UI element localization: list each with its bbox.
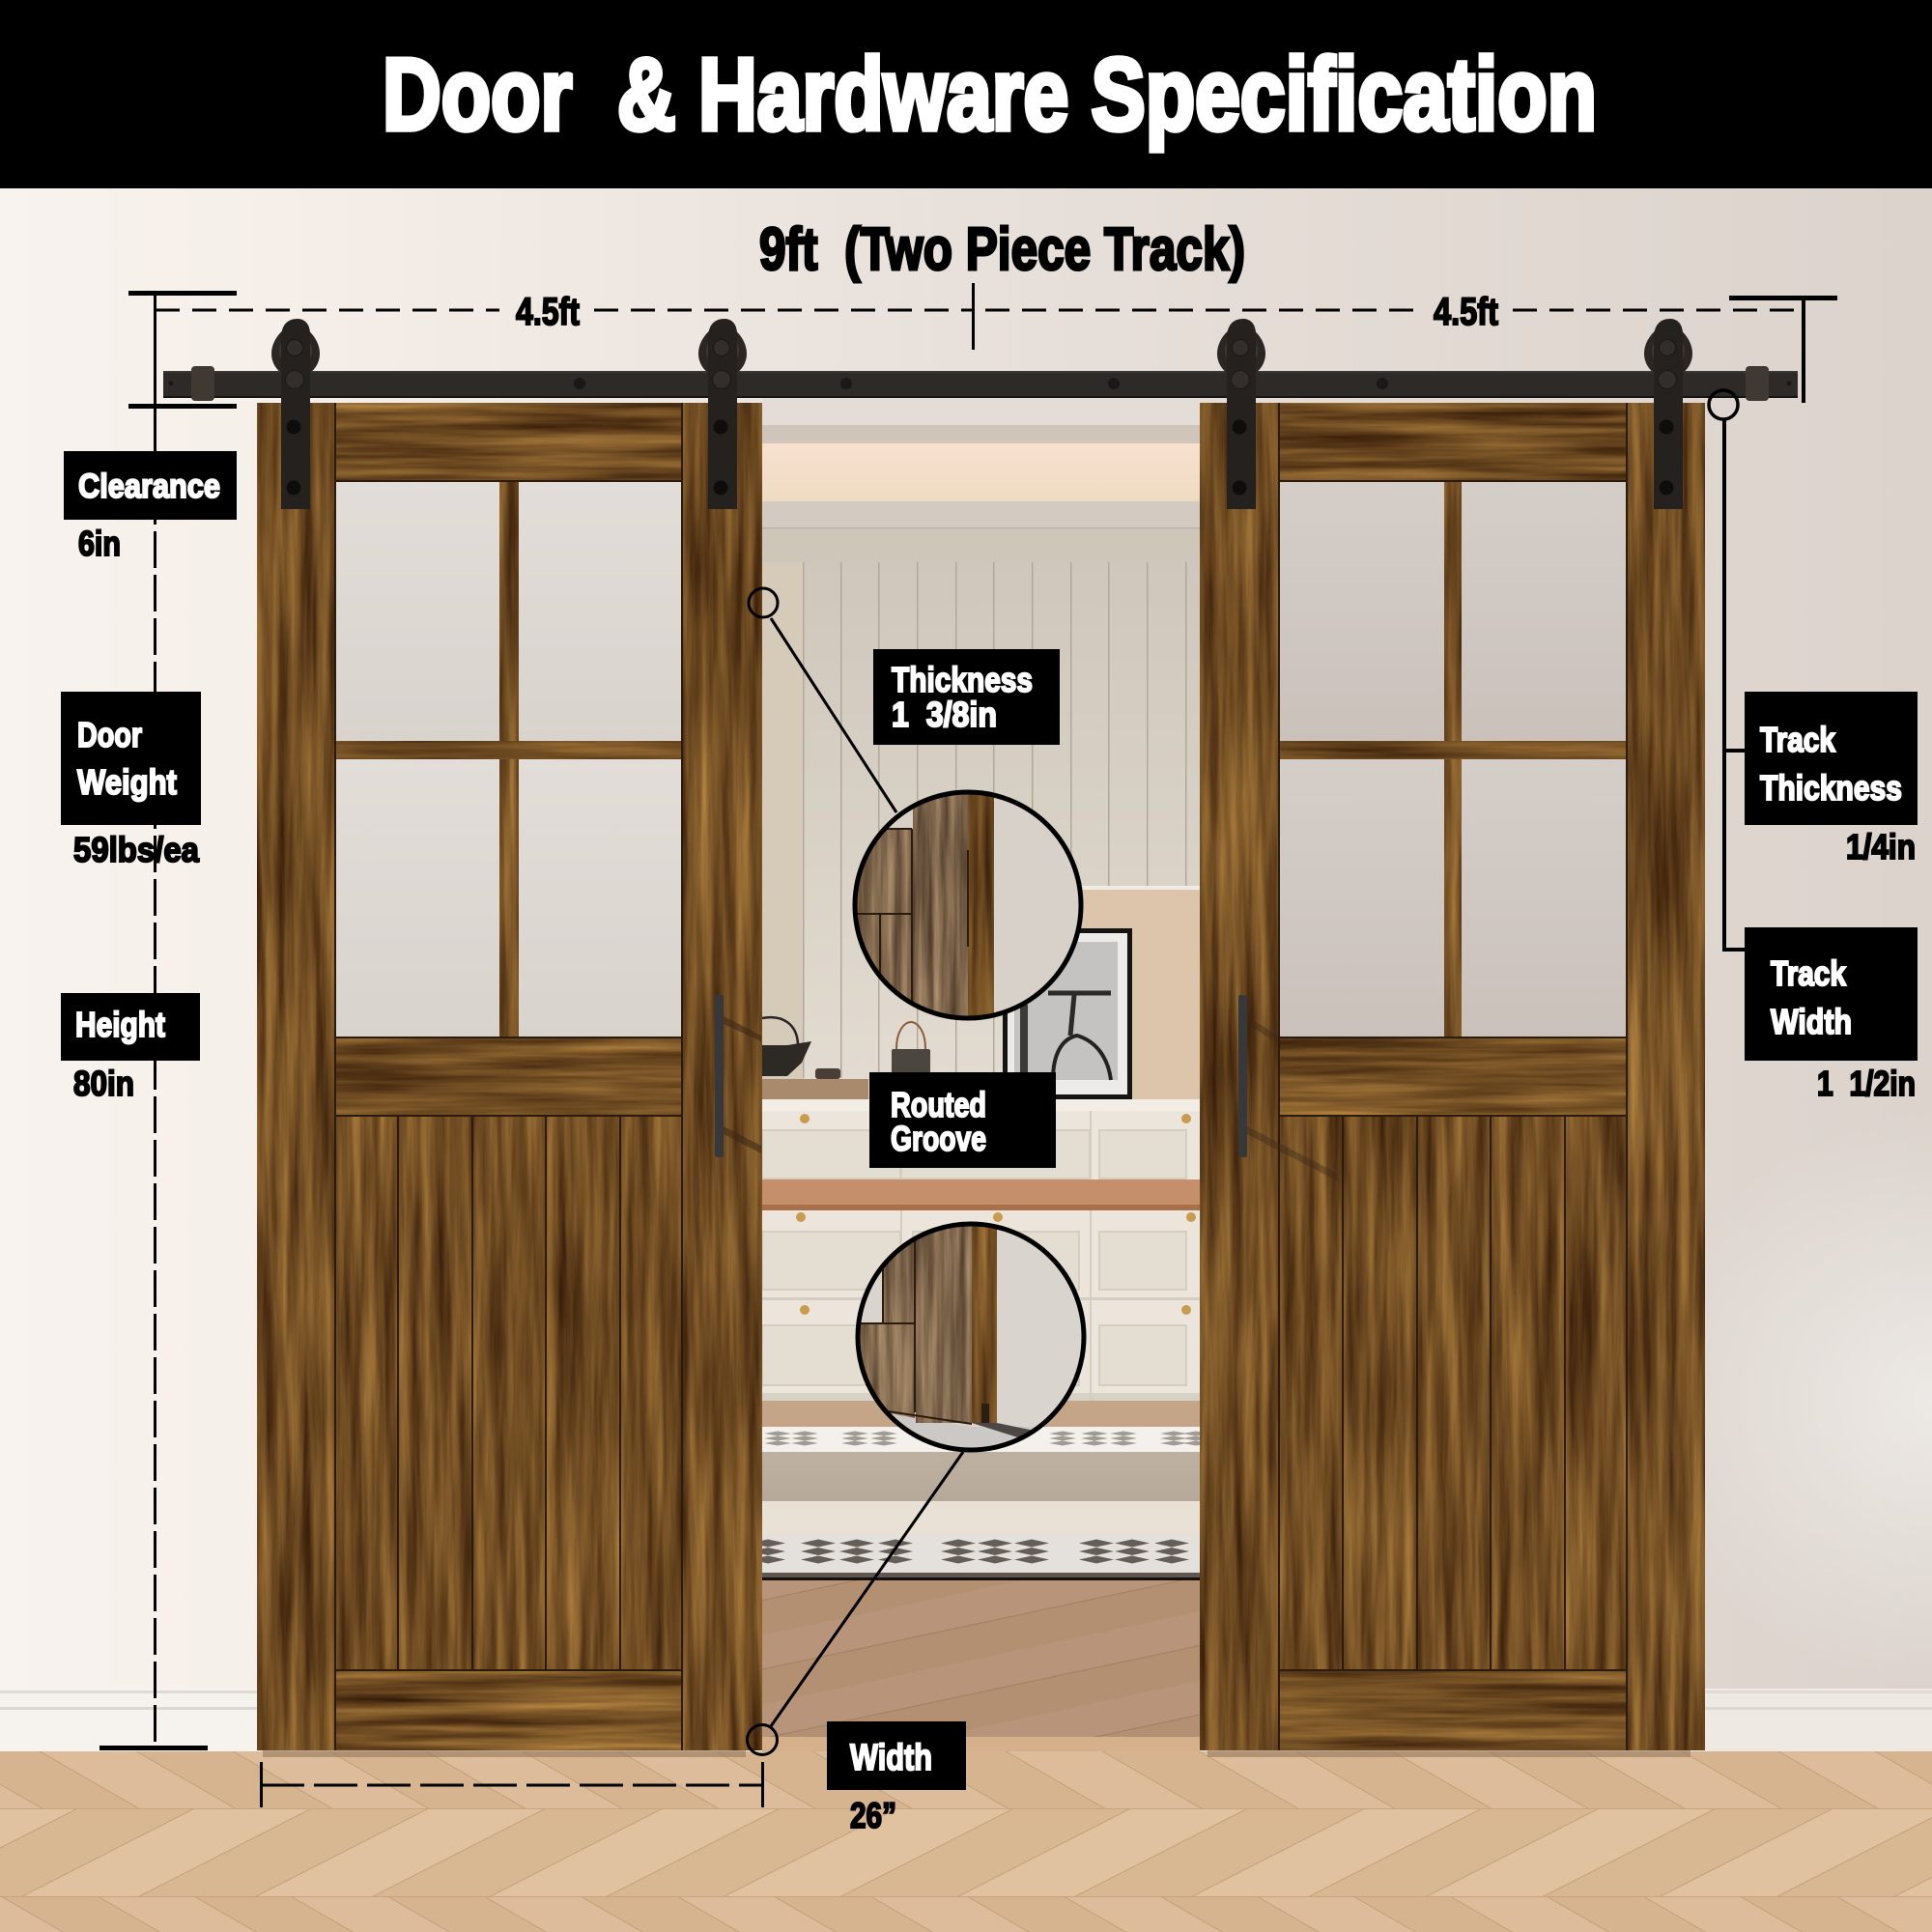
label: routed groove: Groove [891, 1119, 986, 1158]
left door bar handle [715, 995, 761, 1157]
magnifier: routed groove [856, 1223, 1086, 1451]
label: track width [1745, 927, 1918, 1103]
door width dimension line [260, 1762, 764, 1807]
right door vertical wood parts [1200, 403, 1705, 1750]
label: track thickness [1745, 692, 1918, 867]
track dimension lines [128, 283, 1837, 409]
label: door weight: Weight [77, 762, 177, 802]
left barn door [257, 403, 762, 1750]
patterned rug [751, 1427, 1209, 1580]
right door glass panes [1279, 482, 1627, 1037]
label: door width: Width [850, 1738, 932, 1778]
right door rails [1279, 403, 1627, 1750]
track thickness and width leader [1709, 390, 1745, 950]
leader: door width [748, 1452, 963, 1754]
track rivets [168, 378, 1791, 389]
right door joints and plank grooves [1278, 403, 1628, 1750]
plaster backsplash [1005, 889, 1200, 1099]
label: door thickness: Thickness [892, 660, 1033, 699]
label: door width [827, 1721, 966, 1835]
label: routed groove: Routed [891, 1085, 986, 1124]
barn door track [163, 366, 1798, 401]
hanger straps and wheels [271, 319, 1692, 509]
interior floor strip [762, 1401, 1200, 1427]
label: track width: Track [1771, 953, 1847, 993]
label: door weight [61, 692, 201, 869]
magnifier: door edge thickness [854, 791, 1082, 1021]
label: door weight: Door [77, 715, 142, 754]
cabinets [762, 1099, 1200, 1401]
left door glass panes [335, 482, 682, 1037]
label: door thickness: 1 3/8in [892, 695, 997, 734]
wall panel grooves [803, 562, 1186, 1078]
title bar [0, 0, 1932, 188]
left track segment label: 4.5ft [516, 291, 580, 333]
leader: door thickness [749, 588, 896, 812]
label: track width: 1 1/2in [1817, 1064, 1916, 1103]
title: Door & Hardware Specification [383, 38, 1597, 152]
label: track width: Width [1771, 1002, 1852, 1041]
label: door thickness [873, 649, 1060, 745]
ceramic kettle [892, 1022, 930, 1078]
door shadow on floor [263, 1750, 1690, 1757]
door height dimension line [99, 296, 208, 1750]
label: clearance: Clearance [78, 468, 220, 505]
shaded floor [762, 1580, 1200, 1737]
shaded side wall [762, 562, 804, 1099]
label: track thickness: 1/4in [1846, 827, 1916, 867]
left door vertical wood parts [257, 403, 762, 1750]
baseboard [0, 1689, 1932, 1751]
left door joints and plank grooves [334, 403, 683, 1750]
label: height: Height [75, 1005, 165, 1044]
label: clearance [64, 451, 237, 563]
herringbone wood floor [0, 1751, 1932, 1932]
track end stops [191, 366, 1769, 401]
right track segment label: 4.5ft [1434, 291, 1498, 333]
label: clearance: 6in [78, 524, 121, 563]
iron teapot [762, 1017, 840, 1079]
threshold floor [762, 1737, 1200, 1751]
right barn door [1200, 403, 1705, 1750]
label: height [61, 993, 200, 1103]
label: door width: 26” [850, 1796, 896, 1835]
wooden tray [762, 1079, 868, 1100]
interior room seen through opening [751, 398, 1209, 1751]
track length heading: 9ft (Two Piece Track) [759, 216, 1245, 283]
label: routed groove [869, 1072, 1056, 1168]
butcher block counter [762, 1179, 1200, 1210]
left door rails [335, 403, 682, 1750]
label: door weight: 59lbs/ea [73, 830, 200, 869]
label: height: 80in [73, 1064, 134, 1103]
framed bicycle print [1003, 928, 1132, 1099]
right door bar handle [1238, 995, 1338, 1181]
label: track thickness: Thickness [1760, 768, 1902, 808]
label: track thickness: Track [1760, 720, 1836, 759]
